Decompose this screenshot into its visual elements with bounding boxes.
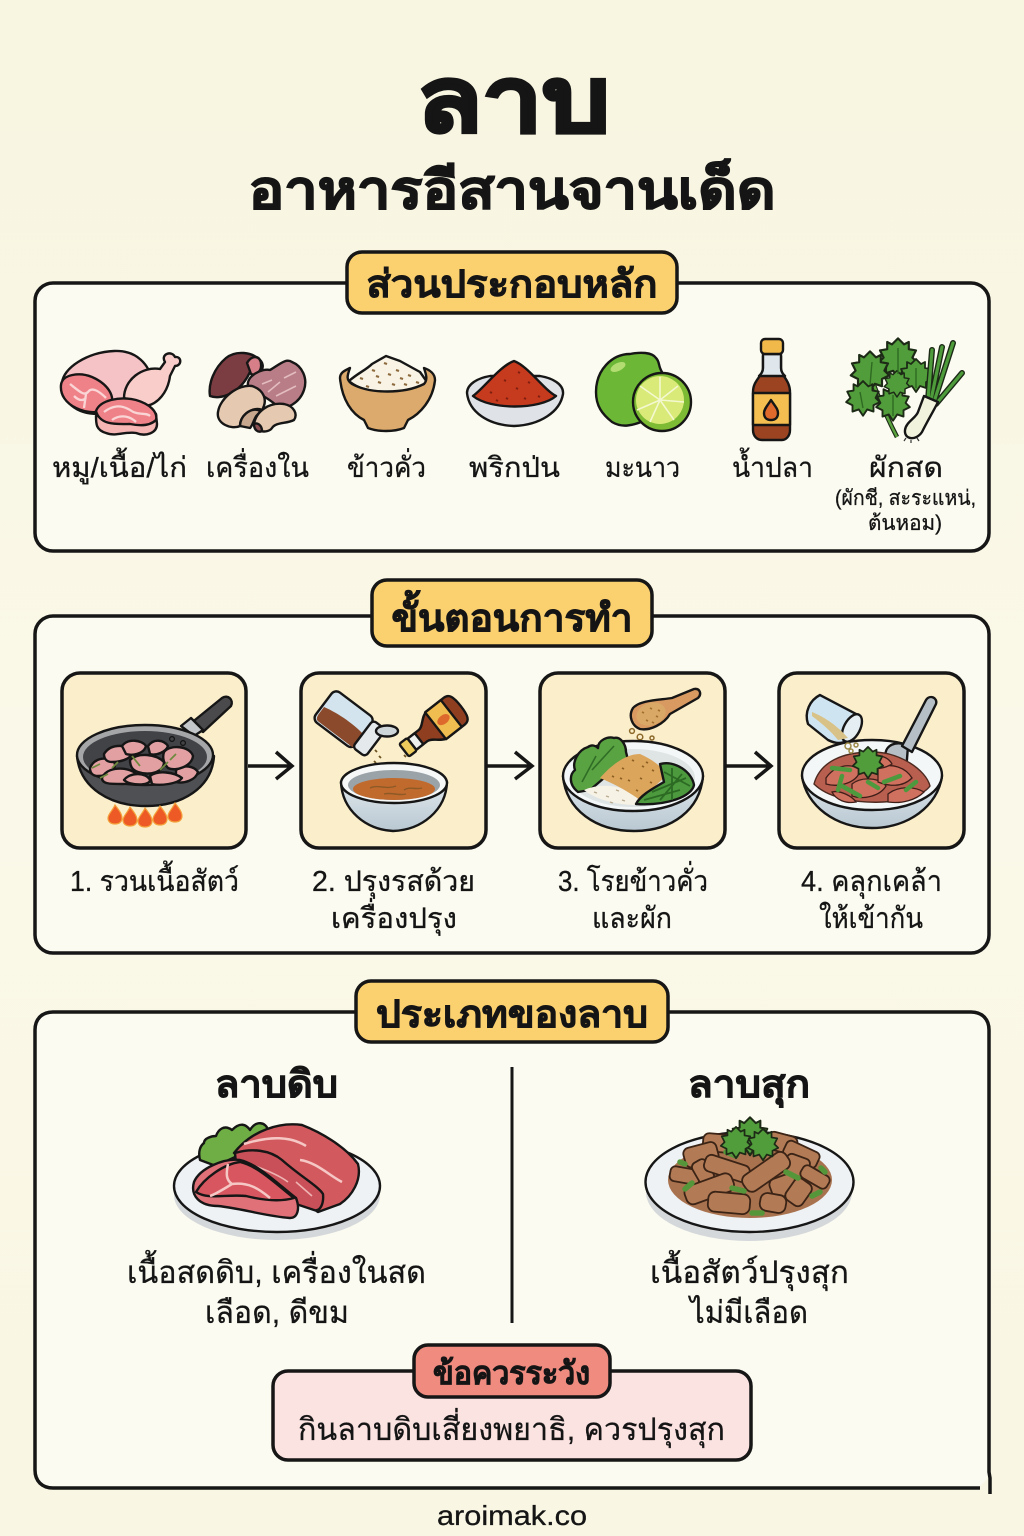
step labels <box>70 860 942 936</box>
step labels: เครื่องปรุง <box>331 898 457 936</box>
ingredient: chili powder <box>467 361 563 426</box>
illustration: cooked meat on plate <box>646 1117 854 1241</box>
heading tab: types of larb <box>356 981 668 1042</box>
ingredient labels: หมู/เนื้อ/ไก่ <box>52 447 187 485</box>
ingredient labels: (ผักชี, สะระแหน่, <box>835 487 976 510</box>
ingredient: lime <box>596 353 691 431</box>
ingredient labels: ข้าวคั่ว <box>347 448 426 483</box>
step labels: ให้เข้ากัน <box>819 901 923 935</box>
step 4: tossing salad <box>779 673 964 848</box>
heading tab: cooking steps <box>372 580 652 646</box>
ingredient labels: ต้นหอม) <box>868 512 942 535</box>
column: raw larb: เลือด, ดีขม <box>205 1295 349 1330</box>
ingredient labels <box>52 447 976 535</box>
footer source: aroimak.co <box>437 1500 587 1531</box>
column: raw larb: ลาบดิบ <box>215 1064 338 1106</box>
callout: warning: กินลาบดิบเสี่ยงพยาธิ, ควรปรุงสุก <box>298 1408 725 1449</box>
title: ลาบ <box>417 51 610 151</box>
ingredient: meat <box>61 351 180 435</box>
step labels: และผัก <box>592 903 672 935</box>
ingredient: toasted rice powder <box>340 356 435 431</box>
ingredient labels: พริกป่น <box>469 452 560 483</box>
heading tab: main ingredients: ส่วนประกอบหลัก <box>366 264 658 306</box>
panel: cooking steps <box>35 580 989 953</box>
step labels: 3. โรยข้าวคั่ว <box>558 861 708 898</box>
ingredient labels: น้ำปลา <box>732 447 813 483</box>
step 1: pan over flame <box>62 673 246 848</box>
step labels: 1. รวนเนื้อสัตว์ <box>70 860 239 898</box>
arrow <box>487 752 532 779</box>
step labels: 4. คลุกเคล้า <box>801 866 942 899</box>
ingredient: fish sauce <box>753 339 790 440</box>
ingredient: offal <box>210 353 305 432</box>
heading tab: cooking steps: ขั้นตอนการทำ <box>392 590 632 640</box>
column: cooked larb: ลาบสุก <box>688 1064 810 1108</box>
callout: warning <box>273 1345 751 1460</box>
column: raw larb: เนื้อสดดิบ, เครื่องในสด <box>127 1250 426 1290</box>
column: cooked larb: ไม่มีเลือด <box>687 1295 808 1330</box>
arrow <box>726 752 771 779</box>
ingredient labels: เครื่องใน <box>206 448 309 483</box>
heading tab: main ingredients <box>347 252 677 313</box>
panel: types of larb <box>35 981 990 1494</box>
heading tab: types of larb: ประเภทของลาบ <box>376 994 648 1036</box>
column: raw larb <box>127 1064 426 1330</box>
ingredient labels: ผักสด <box>869 452 943 483</box>
subtitle: อาหารอีสานจานเด็ด <box>248 159 776 220</box>
column: cooked larb <box>646 1064 854 1330</box>
ingredient labels: มะนาว <box>605 452 680 483</box>
panel: main ingredients <box>35 252 989 551</box>
callout: warning: ข้อควรระวัง <box>433 1355 590 1391</box>
step 3: adding toasted rice and vegetables <box>540 673 725 848</box>
illustration: raw meat on plate <box>174 1123 380 1240</box>
arrow <box>248 752 292 779</box>
step labels: 2. ปรุงรสด้วย <box>312 866 475 899</box>
ingredient: fresh herbs <box>846 338 962 443</box>
divider <box>510 1067 514 1323</box>
step 2: seasoning bowl <box>301 673 486 848</box>
column: cooked larb: เนื้อสัตว์ปรุงสุก <box>650 1250 849 1292</box>
